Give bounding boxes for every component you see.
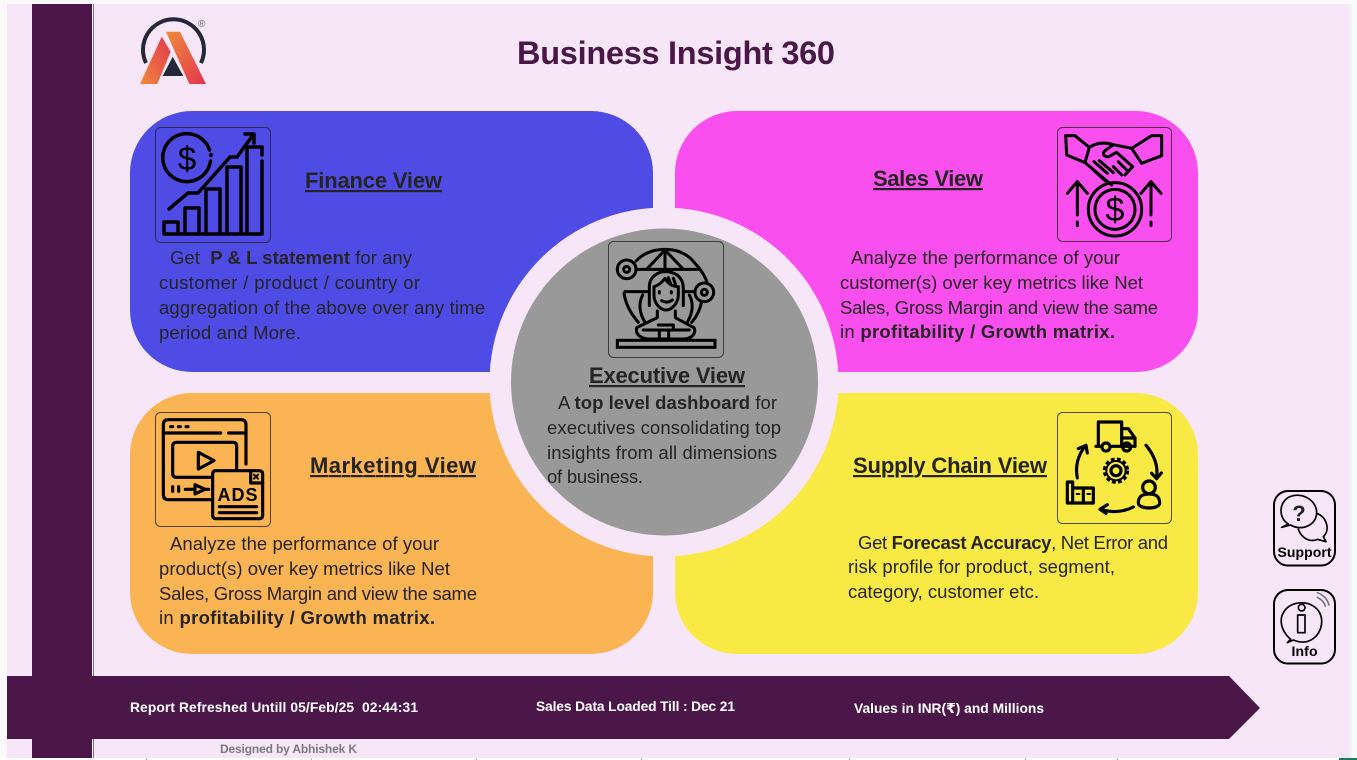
icon: executive with globe	[608, 242, 724, 358]
text: sales description: in profitability / Growth matrix.	[840, 321, 1115, 342]
text: supply chain description	[848, 532, 1168, 602]
icon: video ads: ADS	[218, 485, 258, 505]
icon: supply chain cycle	[1058, 412, 1172, 524]
icon: handshake and coin	[1058, 128, 1172, 242]
button: support: Support	[1278, 544, 1332, 560]
heading: marketing view: Marketing View	[310, 453, 477, 478]
text: executive description: executives consolidating top	[547, 417, 781, 438]
text: sales description: Analyze the performance of your	[851, 247, 1120, 268]
panel: marketing view	[130, 393, 653, 654]
text: executive description	[547, 392, 781, 487]
button: support	[1274, 491, 1335, 566]
panel: sales view	[675, 111, 1198, 372]
text: sales data loaded: Sales Data Loaded Till : Dec 21	[536, 699, 735, 714]
text: marketing description: Analyze the performance of your	[170, 533, 439, 554]
text: marketing description: product(s) over key metrics like Net	[159, 558, 450, 579]
footer banner arrow	[7, 676, 1260, 739]
text: marketing description: in profitability / Growth matrix.	[159, 607, 435, 628]
text: finance description	[159, 247, 485, 343]
panel: supply chain view	[675, 393, 1198, 654]
logo	[140, 19, 206, 84]
text: executive description: insights from all dimensions	[547, 442, 777, 463]
text: finance description: Get P & L statement for any	[170, 247, 413, 268]
text: executive description: of business.	[547, 466, 643, 487]
text: sales description: customer(s) over key metrics like Net	[840, 272, 1143, 293]
heading: supply chain view: Supply Chain View	[853, 453, 1048, 478]
icon: handshake and coin: $	[1106, 191, 1125, 229]
left sidebar	[32, 4, 94, 758]
button: support: ?	[1292, 501, 1306, 526]
text: report refreshed: Report Refreshed Untill 05/Feb/25 02:44:31	[130, 700, 418, 715]
text: finance description: period and More.	[159, 322, 301, 343]
panel: executive view	[490, 208, 838, 556]
button: info	[1274, 590, 1335, 664]
panel: finance view	[130, 111, 653, 372]
button: info: Info	[1292, 643, 1318, 659]
text: executive description: A top level dashboard for	[558, 392, 777, 413]
text: sales description: Sales, Gross Margin and view the same	[840, 297, 1158, 318]
text: marketing description: Sales, Gross Margin and view the same	[159, 583, 477, 604]
text: supply chain description: Get Forecast Accuracy, Net Error and	[858, 532, 1168, 553]
text: supply chain description: category, customer etc.	[848, 581, 1039, 602]
heading: executive view: Executive View	[589, 363, 746, 388]
text: sales description	[840, 247, 1158, 342]
logo: ®	[198, 19, 206, 30]
text: finance description: customer / product / country or	[159, 272, 420, 293]
icon: video ads	[156, 412, 270, 526]
text: supply chain description: risk profile for product, segment,	[848, 556, 1115, 577]
title: Business Insight 360	[517, 35, 835, 71]
text: finance description: aggregation of the above over any time	[159, 297, 485, 318]
designer credit: Designed by Abhishek K	[220, 742, 357, 756]
heading: sales view: Sales View	[873, 166, 984, 191]
text: marketing description	[159, 533, 477, 628]
icon: finance growth chart	[156, 128, 270, 242]
heading: finance view: Finance View	[305, 168, 443, 193]
icon: finance growth chart: $	[178, 140, 196, 177]
text: values note: Values in INR(₹) and Millions	[854, 701, 1044, 716]
